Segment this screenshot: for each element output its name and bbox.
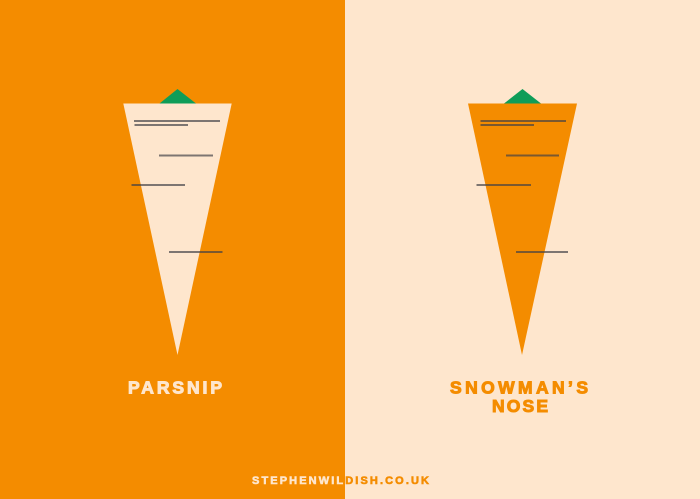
icon: carrot nose [468, 89, 577, 355]
icon: parsnip [123, 89, 232, 355]
heading: snowman's nose [450, 378, 588, 416]
parsnip root lines [132, 121, 222, 252]
panel: right cream background [345, 0, 700, 499]
carrot body [468, 104, 577, 355]
footer url: STEPHENWILDISH.CO.UK [252, 475, 429, 487]
carrot root lines [476, 121, 568, 252]
heading: parsnip: PARSNIP [128, 378, 222, 398]
panel: left orange background [0, 0, 345, 499]
heading: snowman's nose: SNOWMAN’S [450, 378, 588, 398]
carrot leaf [504, 89, 541, 104]
parsnip leaf [160, 89, 196, 104]
parsnip body [123, 104, 232, 355]
heading: snowman's nose: NOSE [492, 396, 548, 416]
